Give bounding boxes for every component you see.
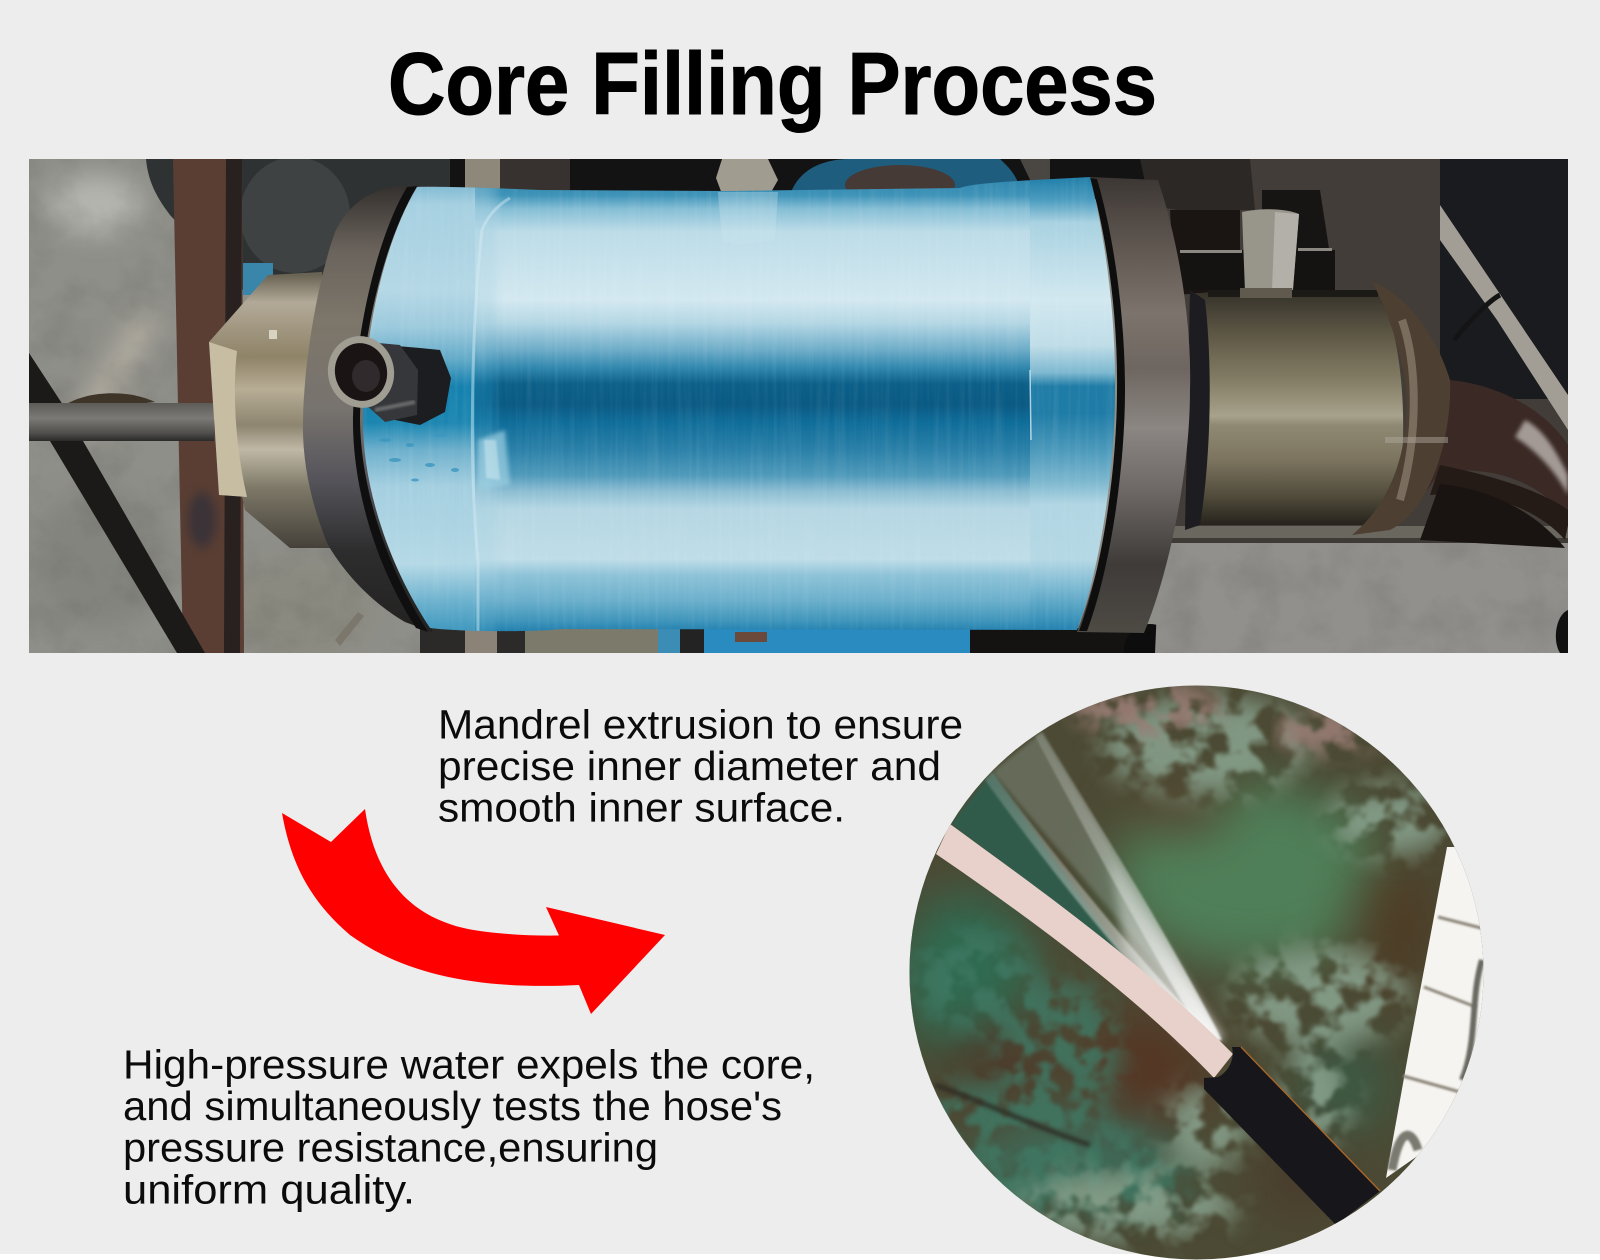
- grey rod: [29, 403, 214, 441]
- nozzle body: [209, 272, 330, 548]
- right background: [1166, 159, 1568, 526]
- arrow: curved red arrow: [282, 809, 665, 1014]
- dark upper background left: [146, 159, 450, 290]
- bolt fitting: [328, 336, 451, 425]
- elbow pipe: [1426, 380, 1568, 510]
- title: Core Filling Process: [388, 34, 1157, 133]
- label: mandrel extrusion: [438, 702, 963, 830]
- far-side pin: [335, 612, 364, 646]
- welded collar: [1352, 282, 1450, 535]
- grey table lower right: [1155, 540, 1568, 653]
- pink-brown mottling: [1070, 680, 1385, 754]
- rusty post: [173, 159, 244, 653]
- label: mandrel extrusion: smooth inner surface.: [438, 784, 845, 830]
- black diagonal strut: [29, 353, 62, 403]
- steel drum: [1185, 293, 1403, 525]
- label: mandrel extrusion: Mandrel extrusion to ensure: [438, 702, 963, 748]
- nozzle hex face: [209, 342, 247, 497]
- top centre background: [450, 159, 1150, 199]
- black braided hose: [1204, 1047, 1380, 1225]
- blue cylinder: [355, 170, 1125, 640]
- photo: mandrel extrusion head: [29, 157, 1570, 676]
- pale grey-green mottling: [1020, 695, 1452, 1240]
- soft colour fields: [900, 785, 1437, 1215]
- label: high-pressure water test: and simultaneously tests the hose's: [123, 1083, 782, 1129]
- label: high-pressure water test: pressure resistance,ensuring: [123, 1124, 658, 1170]
- teal mottling: [913, 929, 1192, 1223]
- bottom centre background: [525, 625, 1080, 653]
- label: mandrel extrusion: precise inner diameter and: [438, 743, 941, 789]
- label: high-pressure water test: [123, 1042, 815, 1212]
- water spray: [950, 732, 1224, 1042]
- light diagonal rail: [1440, 205, 1568, 430]
- white tiles: [1386, 847, 1484, 1178]
- label: high-pressure water test: High-pressure water expels the core,: [123, 1042, 815, 1088]
- photo: hose water-pressure test (circle): [900, 680, 1495, 1260]
- left flange: [303, 186, 432, 632]
- pink core tube: [936, 824, 1233, 1078]
- threaded pin: [1242, 209, 1299, 292]
- right flange: [1077, 177, 1190, 633]
- label: high-pressure water test: uniform quality.: [123, 1166, 415, 1212]
